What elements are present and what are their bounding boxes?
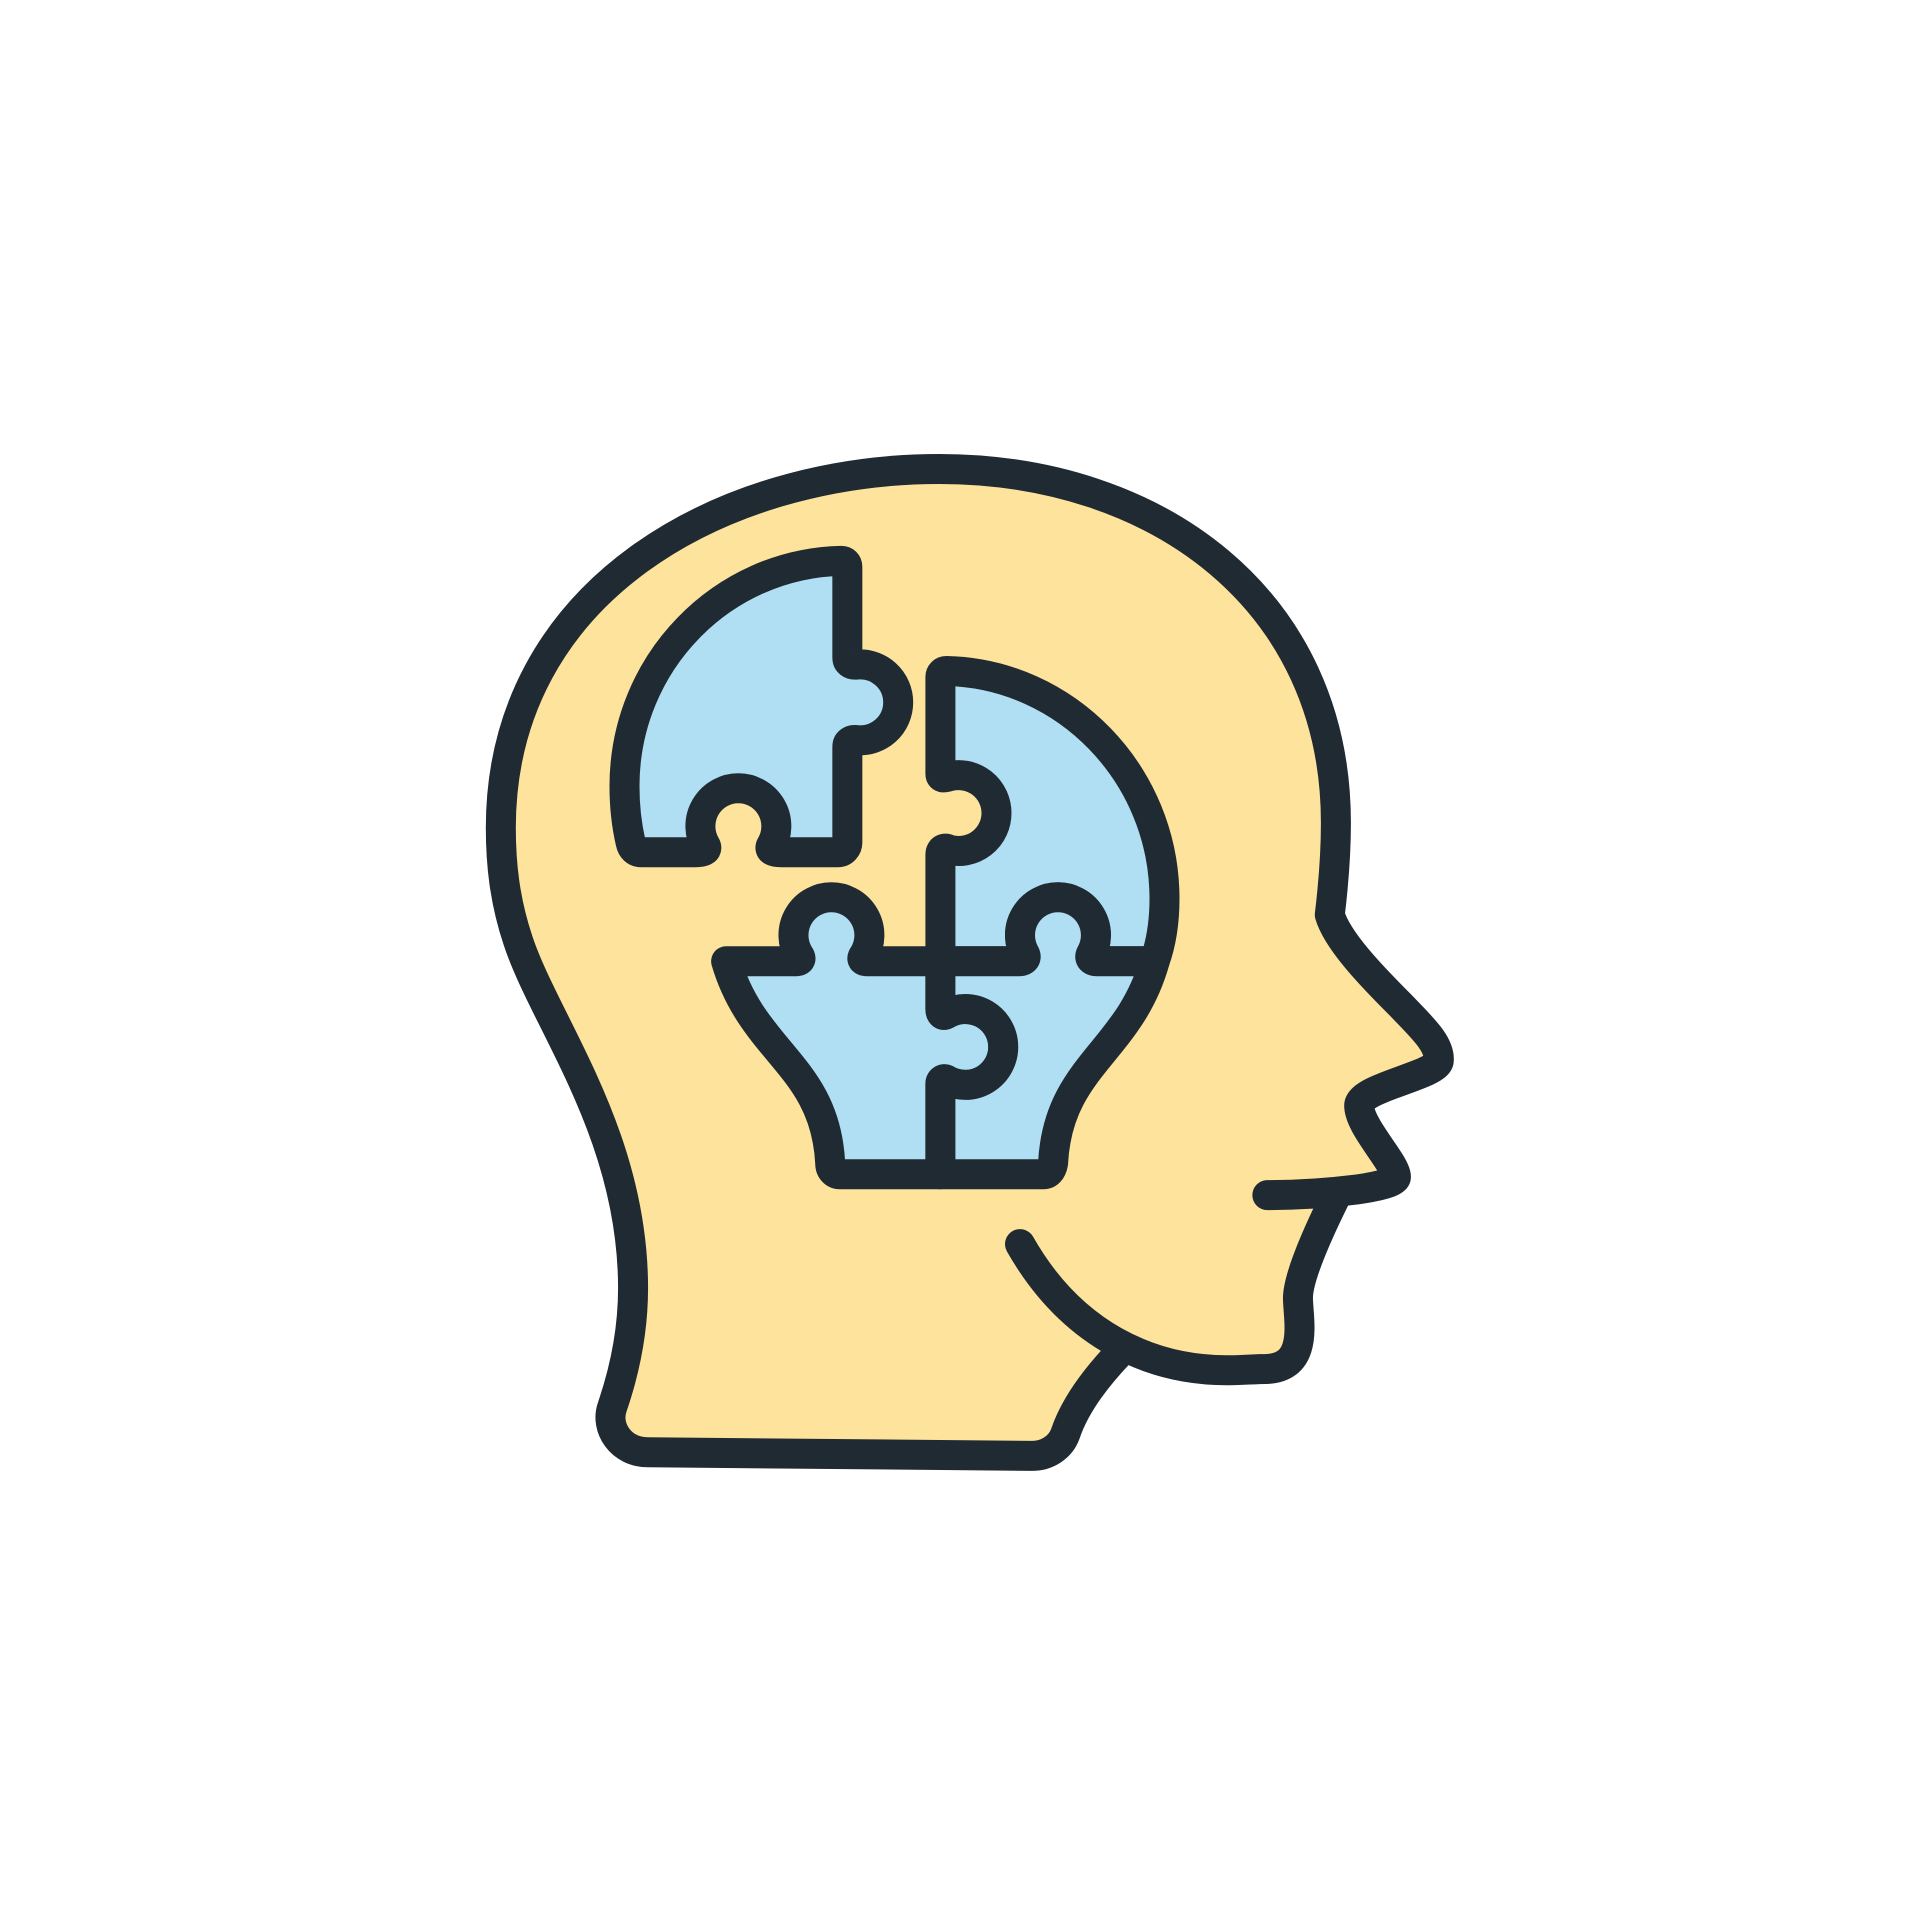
upper right puzzle piece xyxy=(940,671,1164,961)
detached puzzle piece xyxy=(624,561,898,852)
lower left puzzle piece xyxy=(726,897,1003,1174)
lower right puzzle piece xyxy=(940,897,1155,1174)
head outline with nose and lips xyxy=(501,469,1439,1456)
head fill xyxy=(501,469,1439,1456)
puzzle brain xyxy=(624,561,1164,1174)
head silhouette xyxy=(501,469,1439,1456)
jaw and chin line xyxy=(1020,1194,1337,1370)
